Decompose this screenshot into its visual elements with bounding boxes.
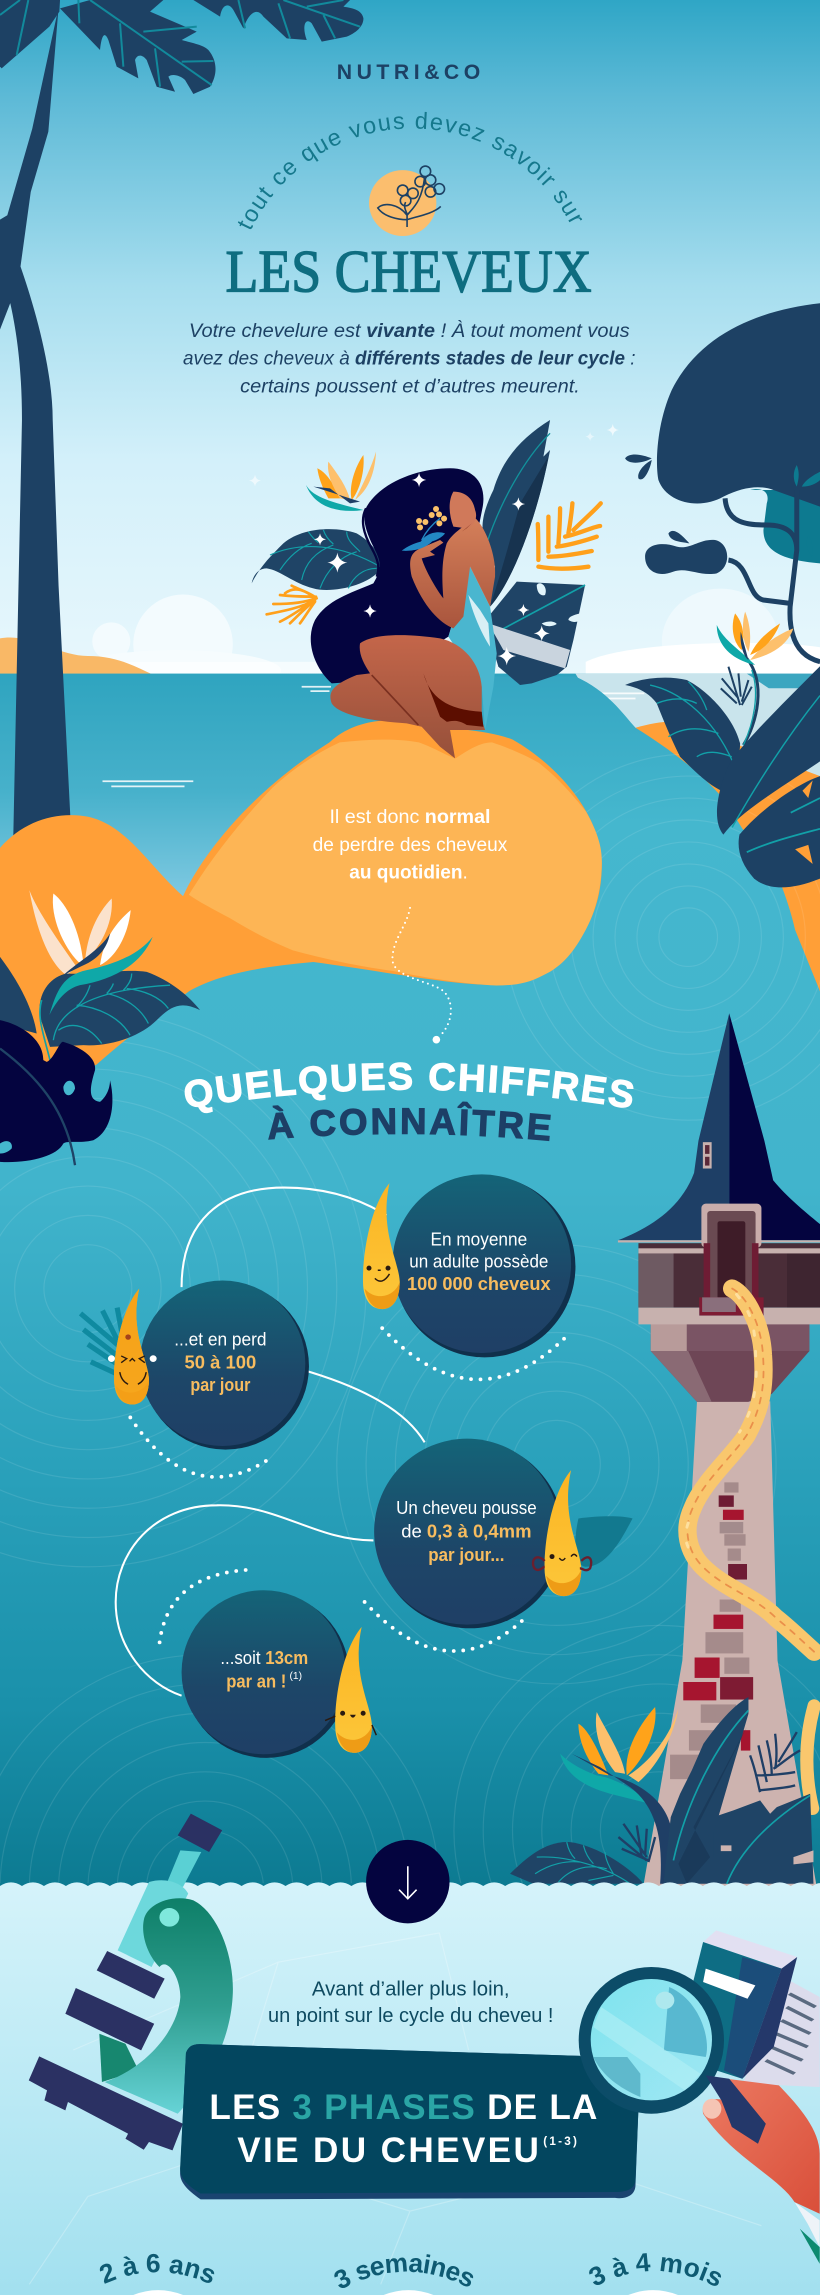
tall dark leaf (483, 420, 550, 607)
hair (311, 468, 483, 683)
stat circle: 50 a 100 par jour: 50 à 100 (184, 1352, 256, 1373)
magnifier handle and cuff (703, 2075, 820, 2264)
white phase circles (133, 2290, 678, 2295)
orange palm right (538, 503, 601, 569)
tower roof (618, 1013, 820, 1242)
small teal leaf behind circle 3 (575, 1516, 633, 1567)
tower bricks (670, 1482, 753, 1779)
heading: quelques chiffres (184, 1062, 634, 1142)
stat circle: 13cm par an: par an ! (226, 1670, 286, 1691)
round leaf (625, 678, 740, 790)
distant sand hill (0, 637, 154, 675)
callout text: normal hair loss (313, 806, 507, 884)
orange palm left (267, 586, 317, 623)
callout text: normal hair loss: au quotidien. (349, 862, 468, 884)
arm and torso (410, 517, 495, 628)
palm tree (0, 0, 363, 842)
clouds (0, 589, 820, 694)
brand logo: NUTRI&CO (337, 61, 480, 84)
stat circle: 0,3 a 0,4mm par jour: Un cheveu pousse (396, 1497, 537, 1518)
white connector lines (116, 1188, 425, 1696)
face (450, 492, 476, 528)
right orange shore (636, 722, 820, 1069)
intro paragraph (183, 319, 636, 397)
heading: quelques chiffres: QUELQUES CHIFFRES (184, 1062, 634, 1114)
stat circle: 50 a 100 par jour (140, 1281, 309, 1450)
sand mound (189, 740, 602, 985)
book (674, 1930, 797, 2079)
intro paragraph: avez des cheveux à différents stades de leur cycle : (183, 348, 636, 370)
tower balcony (638, 1308, 820, 1324)
left plant (0, 890, 200, 1165)
microscope stage leg (99, 2034, 139, 2082)
palm frond top (193, 0, 363, 42)
teal drape (448, 567, 497, 730)
right long leaf (717, 666, 820, 835)
palm frond right (60, 0, 216, 94)
microscope body (118, 1880, 188, 1967)
hair character 2 crying (108, 1289, 157, 1404)
flower bouquet (402, 506, 447, 551)
microscope knob (159, 1908, 179, 1927)
tree branches (725, 490, 820, 662)
icon: flower badge (369, 166, 445, 236)
paper (742, 1980, 820, 2087)
woman with plants (249, 420, 619, 758)
right plants (625, 612, 793, 790)
microscope (29, 1814, 233, 2150)
bird of paradise flower (306, 452, 376, 511)
right monstera (739, 776, 820, 887)
lower section background (0, 1882, 820, 2295)
tree peanut leaf and drops (625, 454, 727, 574)
tree teal foliage (750, 489, 820, 563)
intro paragraph: Votre chevelure est vivante ! À tout moment vous (189, 319, 630, 342)
monstera leaf (488, 582, 585, 685)
stat circle: 0,3 a 0,4mm par jour: par jour... (428, 1544, 504, 1565)
dotted connector (392, 908, 451, 1043)
stat circle: 100 000 cheveux: un adulte possède (409, 1251, 548, 1272)
round leaf (39, 971, 200, 1060)
tower flare (651, 1324, 809, 1402)
teal petal (49, 937, 153, 1015)
leg shadow (423, 673, 483, 727)
tower room (638, 1243, 820, 1308)
stat circle: 50 a 100 par jour: par jour (190, 1374, 250, 1395)
microscope eyepiece (167, 1850, 201, 1887)
phase durations (100, 2253, 721, 2288)
white flower petals (29, 890, 131, 975)
tower plants (510, 1697, 813, 1884)
flower stem (743, 658, 758, 745)
curved subtitle: tout ce que vous devez savoir sur (238, 112, 582, 230)
stat circle: 0,3 a 0,4mm par jour (374, 1439, 564, 1628)
dark monstera (0, 1020, 112, 1165)
stat circle: 100 000 cheveux: 100 000 cheveux (407, 1273, 551, 1294)
intro paragraph: certains poussent et d’autres meurent. (240, 375, 580, 397)
phase durations: 3 semaines (334, 2254, 474, 2288)
phase durations: 3 à 4 mois (589, 2253, 721, 2286)
small fern behind circle 2 (81, 1308, 129, 1379)
tree canopy (657, 303, 820, 507)
long leaf (663, 1697, 748, 1884)
palm fronds (0, 0, 363, 94)
palm frond left (0, 0, 60, 68)
hair character 1 (363, 1183, 400, 1309)
wave texture (0, 754, 820, 1883)
title panel: LES 3 PHASES DE LA (209, 2088, 597, 2127)
main title: LES CHEVEUX (225, 238, 592, 304)
hair character 3 flexing (533, 1470, 591, 1596)
dotted arcs (130, 1328, 569, 1651)
round leaf (252, 529, 381, 590)
bird of paradise flower (560, 1707, 678, 1884)
microscope arm (105, 1898, 233, 2114)
neck shadow (462, 523, 472, 532)
teal textured water (0, 677, 820, 1892)
stat circle: 13cm par an: (1) (290, 1671, 302, 1682)
bird of paradise flower (717, 612, 793, 665)
hair character 4 (325, 1627, 376, 1753)
intro sentence (268, 1977, 554, 2027)
heading: quelques chiffres: À CONNAÎTRE (268, 1102, 551, 1142)
monstera (673, 1794, 813, 1884)
callout text: normal hair loss: Il est donc normal (329, 806, 491, 828)
hand (703, 2079, 820, 2214)
light water wedge at right (575, 674, 820, 791)
intro sentence: un point sur le cycle du cheveu ! (268, 2004, 554, 2027)
palm trunk (0, 7, 70, 842)
ferns (618, 1732, 800, 1862)
sparkles (249, 424, 619, 665)
sea ripples (102, 687, 644, 935)
orange hill (0, 720, 602, 1091)
title panel (180, 2044, 638, 2199)
round leaf (510, 1842, 643, 1884)
stat circle: 13cm par an: ...soit 13cm (220, 1647, 308, 1668)
stat circle: 13cm par an (182, 1590, 349, 1758)
sky background (0, 0, 820, 677)
rapunzel hair braid (686, 1289, 814, 1808)
tower shaft (643, 1401, 817, 1889)
fern (721, 667, 752, 705)
arrow button (366, 1840, 450, 1923)
intro sentence: Avant d’aller plus loin, (312, 1977, 510, 2000)
tower (618, 1013, 820, 1889)
right tree (625, 303, 820, 662)
stat circle: 100 000 cheveux (392, 1174, 575, 1357)
stat circle: 0,3 a 0,4mm par jour: de 0,3 à 0,4mm (401, 1521, 532, 1542)
leg (330, 635, 485, 758)
stat circle: 50 a 100 par jour: ...et en perd (174, 1329, 266, 1350)
tower door (699, 1204, 764, 1316)
lens ring (579, 1967, 724, 2114)
callout text: normal hair loss: de perdre des cheveux (313, 834, 507, 856)
title panel: VIE DU CHEVEU (237, 2131, 539, 2170)
stat circle: 100 000 cheveux: En moyenne (430, 1229, 527, 1250)
pale veil (468, 595, 490, 647)
title panel: (1-3) (543, 2135, 577, 2148)
phase durations: 2 à 6 ans (100, 2254, 214, 2284)
lens glass (591, 1979, 712, 2100)
microscope slabs (29, 1951, 183, 2150)
magnifying glass with book and hand (579, 1930, 820, 2264)
small back leaf (0, 957, 37, 1034)
sea (0, 674, 820, 1142)
